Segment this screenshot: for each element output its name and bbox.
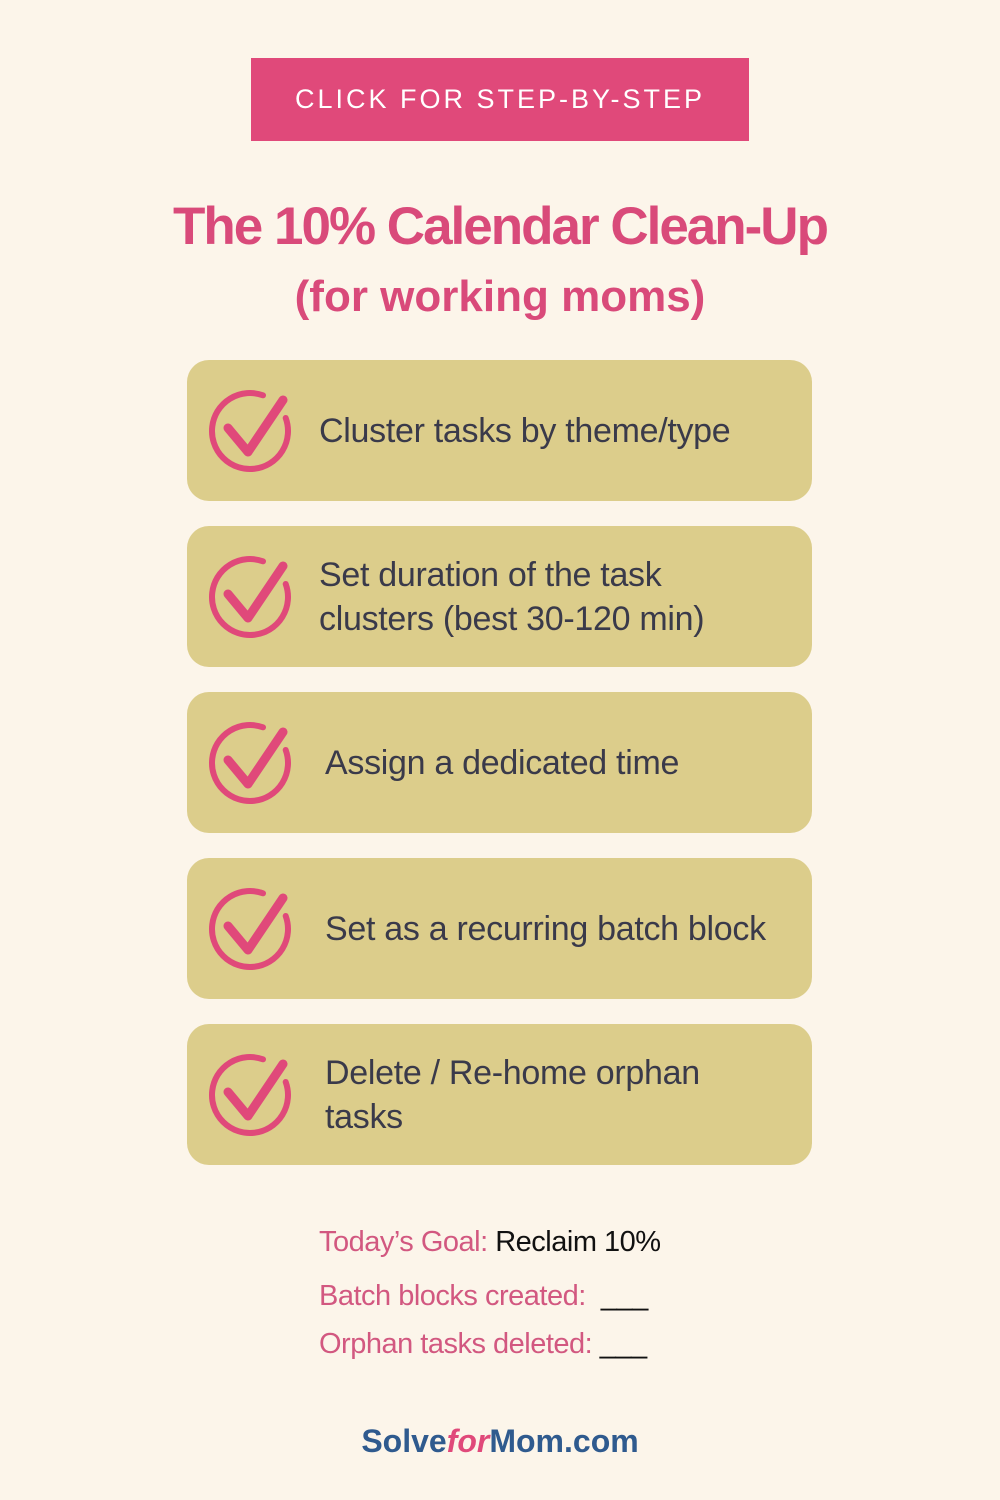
icon: check circle [209, 722, 291, 804]
text: Set as a recurring batch block [325, 910, 766, 948]
icon: check circle [209, 888, 291, 970]
card 2 [187, 526, 812, 667]
text: clusters (best 30-120 min) [319, 600, 704, 638]
text [325, 1054, 700, 1136]
text [319, 556, 704, 638]
goal line: Today’s Goal: Reclaim 10% [319, 1226, 661, 1258]
logo: SolveforMom.com [361, 1423, 639, 1459]
button: click for step-by-step [251, 58, 749, 141]
text: Cluster tasks by theme/type [319, 412, 730, 450]
title: The 10% Calendar Clean-Up [173, 197, 827, 256]
text: Set duration of the task [319, 556, 661, 594]
card 5 [187, 1024, 812, 1165]
icon: check circle [209, 1054, 291, 1136]
card 4 [187, 858, 812, 999]
text: Assign a dedicated time [325, 744, 679, 782]
card 3 [187, 692, 812, 833]
button: click for step-by-step: CLICK FOR STEP-BY-STEP [295, 84, 705, 114]
text: tasks [325, 1098, 403, 1136]
subtitle: (for working moms) [295, 272, 705, 321]
orphan tasks line: Orphan tasks deleted: ___ [319, 1328, 647, 1360]
icon: check circle [209, 556, 291, 638]
card 1 [187, 360, 812, 501]
icon: check circle [209, 390, 291, 472]
text: Delete / Re-home orphan [325, 1054, 700, 1092]
batch blocks line: Batch blocks created: ___ [319, 1280, 648, 1312]
